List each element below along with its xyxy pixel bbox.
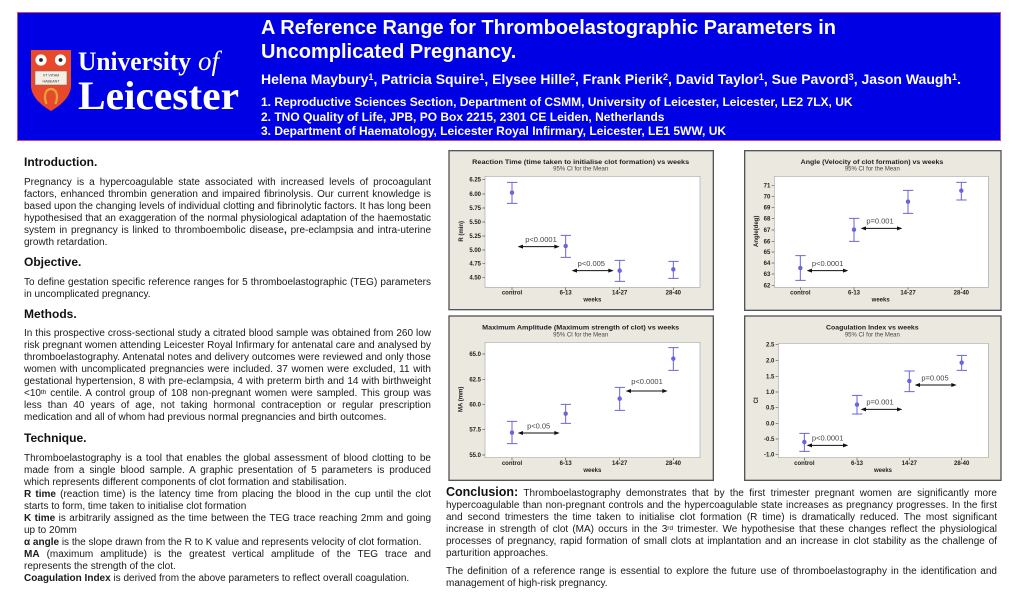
chart: maximum amplitude vs weeks: 14-27 [612,461,628,467]
chart: maximum amplitude vs weeks: 57.5 [469,428,482,434]
chart: reaction time vs weeks: weeks [582,298,602,304]
text block: methods: thromboelastography. Antenatal notes and delivery outcomes were reviewed and only those [24,352,431,363]
text block: conclusion: Conclusion: Thromboelastography demonstrates that by the first trimester pregnant women are significantly more [446,485,997,499]
chart: coagulation index vs weeks [744,315,1002,481]
text block: methods: gestational hypertension, 8 with pre-eclampsia, 4 with preterm birth and 14 with birthweight [24,376,431,387]
text block: technique: which represents different components of clot formation and stabilisation. [24,477,347,488]
chart: coagulation index vs weeks: Coagulation Index vs weeks [826,324,919,331]
text block: technique: Coagulation Index is derived from the above parameters to reflect overall coagulation. [24,573,409,584]
heading: Introduction: Introduction. [24,155,97,169]
wordmark: University [78,47,191,76]
chart: reaction time vs weeks: 4.75 [469,262,482,268]
title [261,16,836,63]
chart: reaction time vs weeks: 5.50 [469,220,482,226]
chart: reaction time vs weeks: 95% CI for the Mean [553,167,608,173]
chart: angle vs weeks: 63 [764,272,771,278]
text block: technique: α angle is the slope drawn from the R to K value and represents velocity of clot formation. [24,537,421,548]
chart: angle vs weeks: 66 [764,239,771,245]
chart: coagulation index vs weeks: -1.0 [764,453,775,459]
chart: reaction time vs weeks: p<0.005 [578,259,605,268]
chart: coagulation index vs weeks: 6-13 [851,461,864,467]
heading: Objective: Objective. [24,255,81,269]
text block: technique [24,452,431,584]
chart: maximum amplitude vs weeks: 62.5 [469,377,482,383]
chart: reaction time vs weeks: 6-13 [560,291,572,297]
icon: shield crest: HABEANT [43,80,60,84]
chart: angle vs weeks [744,150,1002,311]
heading: Methods: Methods. [24,307,77,321]
text block: conclusion: processes of pregnancy, rapid formation of small clots at implantation and an increase in clot stability as the challenge of [446,536,997,547]
chart: coagulation index vs weeks: CI [754,397,760,403]
text block: technique: represents the strength of the clot. [24,561,176,572]
chart: angle vs weeks: p<0.0001 [812,259,843,268]
text block: introduction: growth retardation. [24,237,107,248]
chart: coagulation index vs weeks: 2.5 [766,342,775,348]
chart: angle vs weeks: 28-40 [954,291,970,297]
wordmark [78,46,239,118]
University of Leicester logo [31,46,239,118]
chart: maximum amplitude vs weeks: MA (mm) [458,387,464,412]
chart: reaction time vs weeks: 6.25 [469,178,482,184]
chart: reaction time vs weeks: 14-27 [612,291,628,297]
text block: introduction: based upon the changing levels of individual clotting and fibrinolytic factors. It has long been [24,201,431,212]
chart: reaction time vs weeks: p<0.0001 [525,235,557,244]
title: Uncomplicated Pregnancy. [261,41,516,63]
chart: maximum amplitude vs weeks: p<0.0001 [631,377,663,386]
text block: methods [24,328,431,423]
chart: reaction time vs weeks: R (min) [459,221,465,242]
chart: coagulation index vs weeks: p=0.001 [866,397,894,406]
text block: introduction: hypothesised that an exaggeration of the normal physiological adaptation of the haemostatic [24,213,431,224]
text block: methods: In this prospective cross-sectional study a citrated blood sample was obtained from 260 low [24,328,431,339]
affiliations: 1. Reproductive Sciences Section, Department of CSMM, University of Leicester, Leicester, LE2 7LX, UK [261,95,853,109]
text block: technique: K time is arbitrarily assigned as the time between the TEG trace reaching 2mm and going [24,513,431,524]
heading: Technique: Technique. [24,431,86,445]
chart: angle vs weeks: 62 [764,283,771,289]
chart: maximum amplitude vs weeks: 60.0 [469,402,482,408]
text block: technique: made from a single blood sample. A graphic presentation of 5 parameters is produced [24,465,431,476]
chart: maximum amplitude vs weeks: control [502,461,522,467]
title: A Reference Range for Thromboelastographic Parameters in [261,16,836,38]
text block: methods: less than 40 years of age, not taking hormonal contraception or regular prescription [24,400,431,411]
text block: objective: To define gestation specific reference ranges for 5 thromboelastographic (TEG) parameters [24,277,431,288]
text block: technique: Thromboelastography is a tool that enables the global assessment of blood clotting to be [24,452,431,464]
chart: reaction time vs weeks: 6.00 [469,192,482,198]
chart: angle vs weeks: 71 [764,183,771,189]
chart: angle vs weeks: Angle(deg) [754,216,760,247]
chart: angle vs weeks: 68 [764,217,771,223]
chart: maximum amplitude vs weeks: 65.0 [469,352,482,358]
text block: objective: in uncomplicated pregnancy. [24,289,151,300]
chart: maximum amplitude vs weeks [448,315,714,481]
chart: maximum amplitude vs weeks: 95% CI for the Mean [553,333,608,339]
chart: reaction time vs weeks: 5.25 [469,234,482,240]
text block: technique: MA (maximum amplitude) is the greatest vertical amplitude of the TEG trace and [24,549,431,560]
chart: angle vs weeks: weeks [871,298,890,304]
affiliations [261,95,853,138]
text block: technique: R time (reaction time) is the latency time from placing the blood in the cup until the clot [24,489,431,500]
text block: methods: women with uncomplicated pregnancies were included. 37 women were excluded, 11 with [24,364,431,375]
chart: maximum amplitude vs weeks: 28-40 [666,461,682,467]
chart: angle vs weeks: 14-27 [900,291,916,297]
text block: methods: <10th centile. A control group of 108 non-pregnant women were sampled. This group was [24,388,431,399]
chart: angle vs weeks: control [790,291,811,297]
chart: coagulation index vs weeks: 28-40 [954,461,970,467]
text block: introduction [24,176,431,248]
text block: introduction: Pregnancy is a hypercoagulable state associated with increased levels of procoagulant [24,176,431,188]
text block: introduction: system in pregnancy is linked to thromboembolic disease, pre-eclampsia and intra-uterine [24,225,431,236]
chart: reaction time vs weeks: 28-40 [666,291,682,297]
text block: conclusion [446,485,998,589]
chart: reaction time vs weeks: 4.50 [469,276,482,282]
chart: coagulation index vs weeks: p<0.0001 [812,433,843,442]
chart: maximum amplitude vs weeks: 55.0 [469,453,482,459]
chart: angle vs weeks: 64 [764,261,771,267]
text block: conclusion: and second trimesters the time taken to initialise clot formation (R time) is dramatically reduced. The most significant [446,512,997,523]
chart: reaction time vs weeks: 5.75 [469,206,482,212]
icon: shield crest [31,50,71,111]
chart: reaction time vs weeks: control [502,291,522,297]
text block: conclusion: parturition approaches. [446,548,548,559]
text block: methods: medication and all of whom had previous normal pregnancies and birth outcomes. [24,412,386,423]
wordmark: Leicester [78,73,239,118]
text block: conclusion: The definition of a reference range is essential to explore the future use of thromboelastography in the identification and [446,566,997,577]
chart: coagulation index vs weeks: 95% CI for the Mean [845,333,900,339]
chart: angle vs weeks: 65 [764,250,771,256]
affiliations: 2. TNO Quality of Life, JPB, PO Box 2215, 2301 CE Leiden, Netherlands [261,110,664,124]
chart: coagulation index vs weeks: weeks [873,468,893,474]
text block: conclusion: hypercoagulable than non-pregnant controls and the hypercoagulable state increases as pregnancy progresses. In the first [446,500,997,511]
chart: coagulation index vs weeks: 2.0 [766,358,775,364]
text block: technique: starts to form, time taken to initialise clot formation [24,501,246,512]
chart: reaction time vs weeks [448,150,714,310]
text block: introduction: factors, enhanced thrombin generation and impaired fibrinolysis. Our current knowledge is [24,189,431,200]
chart: coagulation index vs weeks: control [794,461,815,467]
chart: coagulation index vs weeks: 1.5 [766,374,775,380]
authors: Helena Maybury1, Patricia Squire1, Elysee Hille2, Frank Pierik2, David Taylor1, Sue Pavord3, Jason Waugh1. [261,71,961,87]
wordmark: of [198,46,222,76]
chart: angle vs weeks: p=0.001 [866,217,894,226]
chart: angle vs weeks: 70 [764,194,771,200]
chart: coagulation index vs weeks: p=0.005 [921,373,949,382]
chart: coagulation index vs weeks: 0.5 [766,406,775,412]
chart: maximum amplitude vs weeks: Maximum Amplitude (Maximum strength of clot) vs weeks [482,324,679,331]
chart: maximum amplitude vs weeks: 6-13 [560,461,572,467]
chart: angle vs weeks: 67 [764,228,771,234]
icon: shield crest: VT VITAM [43,74,59,78]
chart: coagulation index vs weeks: -0.5 [764,437,775,443]
text block: methods: risk pregnant women attending Leicester Royal Infirmary for antenatal care and analysed by [24,340,431,351]
chart: coagulation index vs weeks: 14-27 [902,461,918,467]
text block: conclusion: management of high-risk pregnancy. [446,578,608,589]
text block: conclusion: increase in strength of clot (MA) occurs in the 3rd trimester. We hypothesise that these changes reflect the physiological [446,524,997,535]
chart: angle vs weeks: Angle (Velocity of clot formation) vs weeks [801,159,944,166]
chart: reaction time vs weeks: 5.00 [469,248,482,254]
text block: technique: up to 20mm [24,525,77,536]
chart: maximum amplitude vs weeks: weeks [582,468,602,474]
text block: objective [24,277,431,300]
chart: angle vs weeks: 95% CI for the Mean [845,167,900,173]
chart: coagulation index vs weeks: 1.0 [766,390,775,396]
affiliations: 3. Department of Haematology, Leicester Royal Infirmary, Leicester, LE1 5WW, UK [261,124,726,138]
chart: angle vs weeks: 69 [764,205,771,211]
chart: coagulation index vs weeks: 0.0 [766,421,775,427]
header banner [17,12,1001,141]
chart: angle vs weeks: 6-13 [848,291,861,297]
chart: reaction time vs weeks: Reaction Time (time taken to initialise clot formation) vs weeks [472,159,689,166]
chart: maximum amplitude vs weeks: p<0.05 [527,421,550,430]
